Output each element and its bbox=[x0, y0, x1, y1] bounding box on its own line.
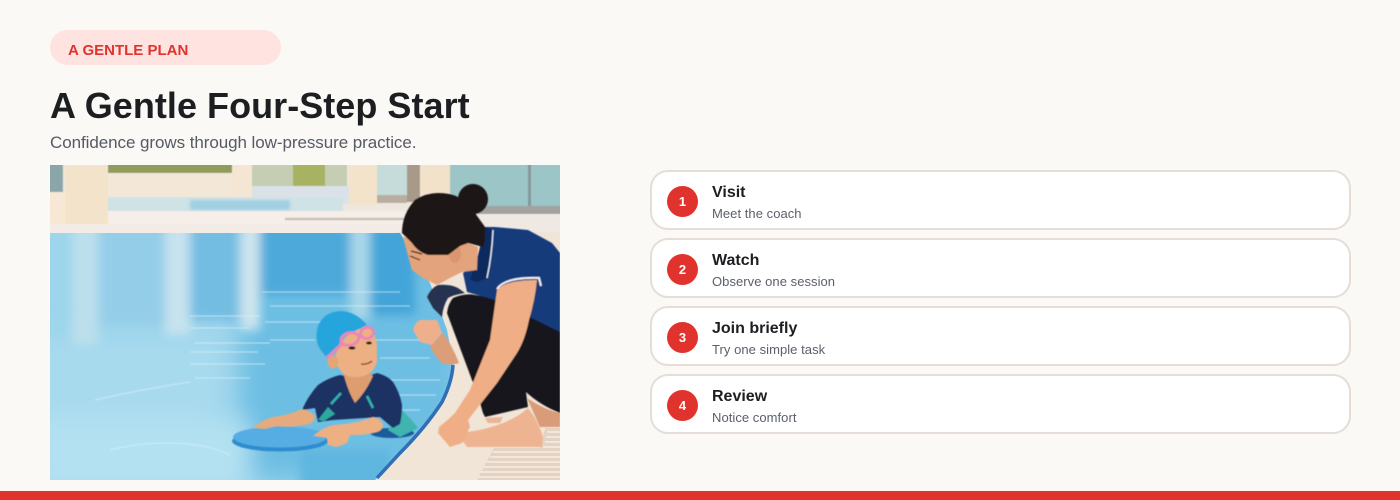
knee bbox=[427, 285, 465, 317]
hair bbox=[402, 193, 485, 255]
description: meet the coach: Meet the coach bbox=[712, 206, 802, 221]
child body swimsuit bbox=[302, 373, 402, 428]
number 1 bbox=[667, 186, 698, 217]
hand bbox=[413, 320, 442, 345]
forearm bbox=[430, 333, 459, 364]
badge: a gentle plan: A GENTLE PLAN bbox=[68, 42, 188, 59]
badge: a gentle plan bbox=[50, 30, 281, 65]
label: review: Review bbox=[712, 388, 767, 405]
step 4: review bbox=[650, 374, 1351, 434]
description: observe one session: Observe one session bbox=[712, 274, 835, 289]
front foot bbox=[462, 408, 543, 447]
bottom accent bar bbox=[0, 491, 1400, 500]
child neck bbox=[343, 368, 373, 403]
number 2 bbox=[667, 254, 698, 285]
description: try one simple task: Try one simple task bbox=[712, 342, 825, 357]
number 3: 3 bbox=[679, 330, 686, 345]
number 1: 1 bbox=[679, 194, 686, 209]
hair bun bbox=[458, 184, 488, 214]
coach bbox=[402, 184, 560, 447]
swim cap bbox=[316, 311, 367, 358]
pool edge tile bbox=[377, 365, 453, 478]
pool water bbox=[50, 233, 454, 480]
kickboard bbox=[232, 426, 328, 452]
step 3: join briefly bbox=[650, 306, 1351, 366]
goggles bbox=[327, 326, 375, 358]
subtitle: Confidence grows through low-pressure practice. bbox=[50, 133, 416, 152]
teal water patch bbox=[388, 410, 418, 437]
deck grate bbox=[477, 428, 560, 480]
eye and brow bbox=[410, 251, 422, 260]
rear foot bbox=[527, 398, 560, 427]
navy polo shirt bbox=[463, 227, 560, 332]
number 4: 4 bbox=[679, 398, 686, 413]
arm bbox=[438, 280, 537, 447]
label: watch: Watch bbox=[712, 252, 759, 269]
child bbox=[253, 311, 418, 447]
water shadow at waist bbox=[370, 428, 414, 438]
neck and face bbox=[403, 235, 478, 285]
number 3 bbox=[667, 322, 698, 353]
description: notice comfort: Notice comfort bbox=[712, 410, 797, 425]
collar bbox=[470, 227, 493, 282]
child left arm bbox=[253, 409, 315, 429]
step 2: watch bbox=[650, 238, 1351, 298]
step 1: visit bbox=[650, 170, 1351, 230]
number 2: 2 bbox=[679, 262, 686, 277]
pool deck bbox=[370, 232, 560, 480]
label: visit: Visit bbox=[712, 184, 746, 201]
title: A Gentle Four-Step Start bbox=[50, 85, 470, 126]
background: poolside building bbox=[50, 165, 560, 233]
number 4 bbox=[667, 390, 698, 421]
child face bbox=[335, 328, 377, 377]
child right arm bbox=[313, 417, 383, 447]
photo: swim coach and child at pool bbox=[50, 165, 560, 480]
label: join briefly: Join briefly bbox=[712, 320, 797, 337]
toes bbox=[485, 417, 503, 423]
black leggings bbox=[447, 294, 560, 417]
